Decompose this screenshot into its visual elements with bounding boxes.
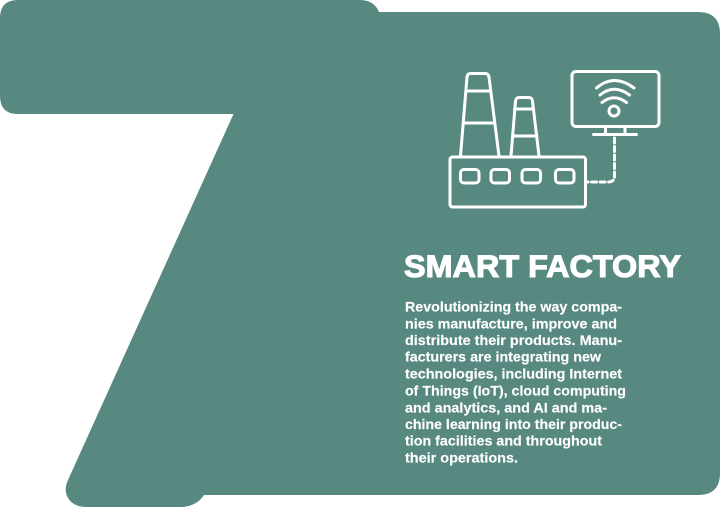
text block: description: technologies, including Internet xyxy=(405,365,622,381)
icon: dashed connection line xyxy=(587,138,614,182)
text block: description: of Things (IoT), cloud computing xyxy=(405,382,626,398)
icon: factory building xyxy=(450,157,586,207)
text block: description: their operations. xyxy=(405,449,518,465)
text block: description: tion facilities and throughout xyxy=(405,433,602,449)
text block: description: distribute their products. Manu- xyxy=(405,332,622,348)
text block: description: chine learning into their produc- xyxy=(405,416,622,432)
text block: description xyxy=(405,299,626,465)
icon: wifi signal xyxy=(596,80,634,116)
icon: factory windows xyxy=(460,170,574,183)
icon: short chimney xyxy=(511,98,539,156)
text block: description: Revolutionizing the way compa- xyxy=(405,299,622,315)
icon: monitor xyxy=(572,72,659,134)
icon: tall chimney xyxy=(460,74,499,156)
heading: SMART FACTORY xyxy=(404,248,681,284)
text block: description: and analytics, and AI and ma- xyxy=(405,399,607,415)
icon: smart factory connected to wifi monitor xyxy=(450,72,659,207)
text block: description: facturers are integrating new xyxy=(405,349,601,365)
text block: description: nies manufacture, improve and xyxy=(405,315,617,331)
